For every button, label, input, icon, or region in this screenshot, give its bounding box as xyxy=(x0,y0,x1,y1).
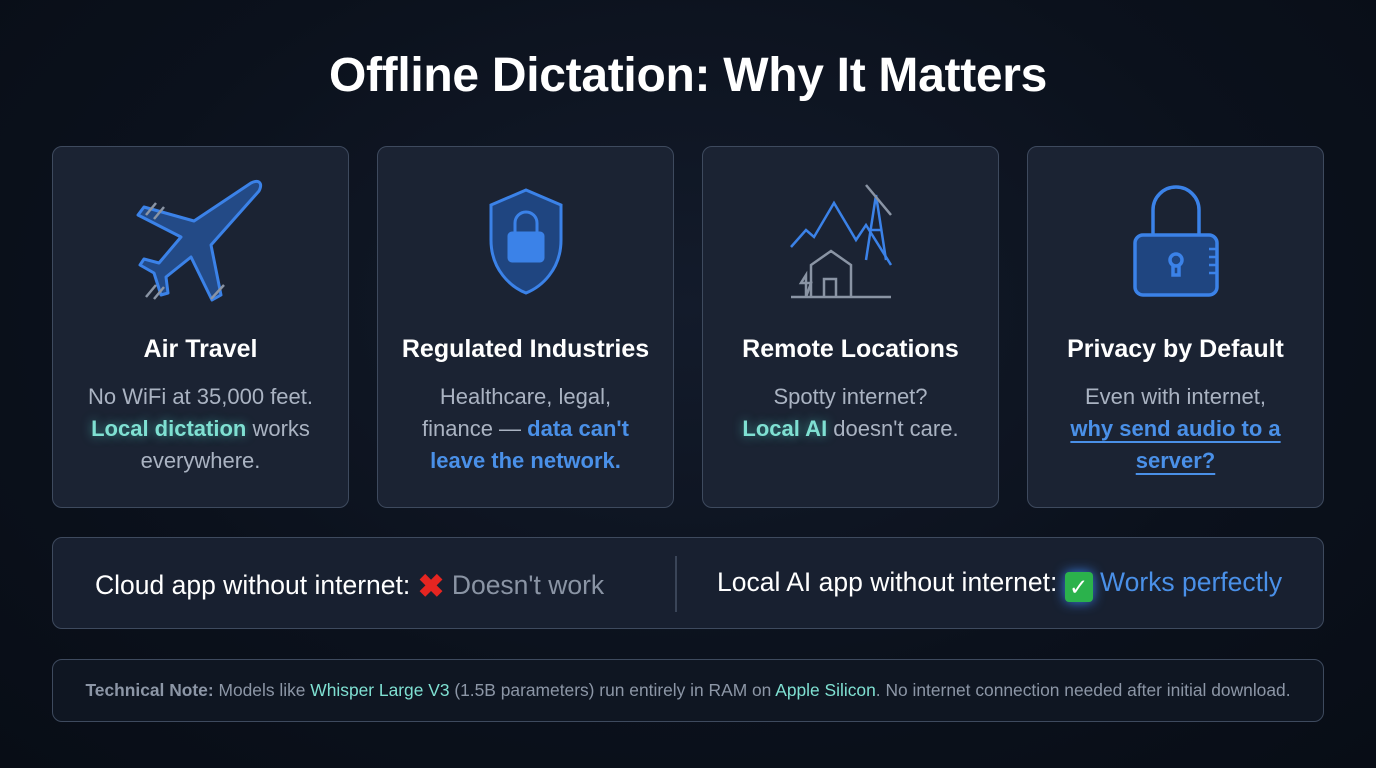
card title: Air Travel xyxy=(144,335,257,363)
card body xyxy=(738,384,959,442)
card body: leave the network. xyxy=(430,448,621,473)
card body xyxy=(1070,384,1281,475)
card body: why send audio to a xyxy=(1070,416,1281,441)
panel: remote locations xyxy=(702,146,999,508)
technical note xyxy=(52,659,1324,722)
icon: shield lock xyxy=(490,188,562,295)
local comparison xyxy=(717,562,1282,612)
card body xyxy=(422,384,629,473)
comparison bar xyxy=(52,537,1324,629)
local comparison: Local AI app without internet: Works perfectly xyxy=(717,567,1282,597)
card title: Remote Locations xyxy=(742,335,959,363)
card body: Even with internet, xyxy=(1085,384,1266,409)
icon: padlock xyxy=(1133,185,1219,297)
icon: airplane xyxy=(136,180,262,302)
icon: mountains and tower xyxy=(790,184,892,298)
card title: Privacy by Default xyxy=(1067,335,1284,363)
card title: Regulated Industries xyxy=(402,335,649,363)
technical note: Technical Note: Models like Whisper Large V3 (1.5B parameters) run entirely in RAM on Apple Silicon. No internet connection needed after initial download. xyxy=(85,680,1291,700)
card body: Local AI doesn't care. xyxy=(742,416,959,441)
panel: air travel xyxy=(52,146,349,508)
panel: regulated industries xyxy=(377,146,674,508)
card body: Local dictation works xyxy=(91,416,310,441)
card body xyxy=(87,384,313,473)
card body: Healthcare, legal, xyxy=(440,384,611,409)
card body: finance — data can't xyxy=(422,416,629,441)
local comparison: ✓ xyxy=(1069,574,1088,600)
card body: server? xyxy=(1136,448,1215,473)
panel: privacy xyxy=(1027,146,1324,508)
card body: Spotty internet? xyxy=(773,384,928,409)
card body: No WiFi at 35,000 feet. xyxy=(88,384,313,409)
card body: everywhere. xyxy=(141,448,260,473)
title: Offline Dictation: Why It Matters xyxy=(329,49,1047,102)
cloud comparison: Cloud app without internet: ✖ Doesn't work xyxy=(95,568,604,604)
